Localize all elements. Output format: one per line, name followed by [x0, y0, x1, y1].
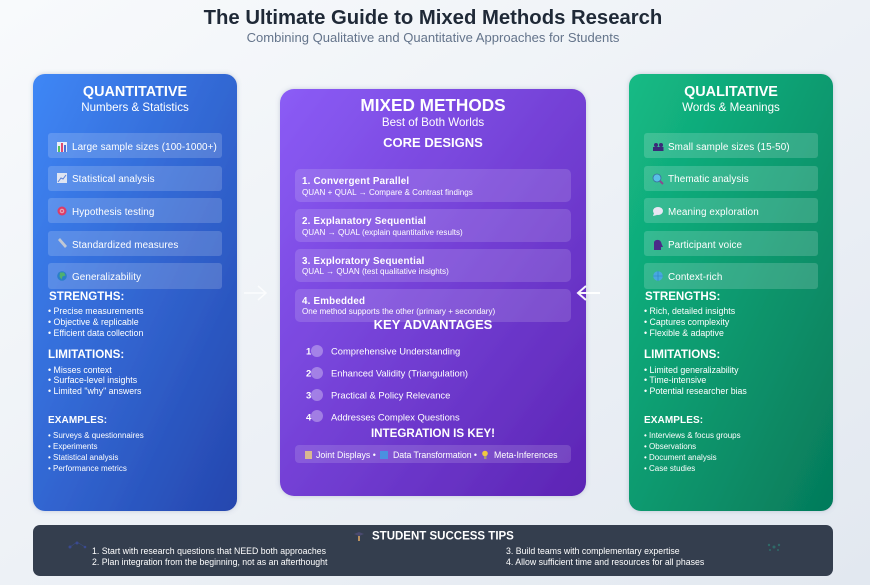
design 2: 2. Explanatory Sequential	[302, 216, 426, 227]
integration bar: Joint Displays •	[316, 450, 376, 460]
strengths: • Flexible & adaptive	[644, 328, 724, 338]
strengths: • Rich, detailed insights	[644, 306, 736, 316]
advantage 4: 4	[306, 412, 312, 424]
arrow: qualitative to mixed	[578, 286, 600, 300]
limitations: • Surface-level insights	[48, 375, 138, 385]
strengths: • Precise measurements	[48, 306, 144, 316]
advantage 1: 1	[306, 346, 312, 358]
examples: EXAMPLES:	[644, 415, 703, 426]
limitations	[644, 348, 747, 396]
integration bar	[295, 445, 571, 463]
advantage 3: Practical & Policy Relevance	[331, 390, 450, 400]
strengths: • Objective & replicable	[48, 317, 139, 327]
item: meaning exploration: Meaning exploration	[668, 207, 759, 218]
examples: • Interviews & focus groups	[644, 431, 741, 440]
tips heading: STUDENT SUCCESS TIPS	[372, 530, 514, 542]
item: statistical analysis: Statistical analysis	[72, 174, 155, 185]
examples	[644, 415, 741, 473]
panel: mixed methods	[280, 89, 586, 496]
examples	[48, 415, 144, 473]
item: generalizability: Generalizability	[72, 272, 141, 283]
design 4	[295, 289, 571, 322]
advantage 2: 2	[306, 368, 311, 380]
examples: • Surveys & questionnaires	[48, 431, 144, 440]
icon: graduation cap	[354, 532, 364, 541]
quantitative heading: QUANTITATIVE	[83, 84, 187, 100]
item: meaning exploration	[644, 198, 818, 223]
tips column 1: 2. Plan integration from the beginning, not as an afterthought	[92, 557, 328, 567]
tips column 1: 1. Start with research questions that NEED both approaches	[92, 546, 327, 556]
design 1: 1. Convergent Parallel	[302, 176, 409, 187]
strengths: STRENGTHS:	[49, 290, 124, 303]
qualitative heading: QUALITATIVE	[684, 84, 778, 100]
examples: EXAMPLES:	[48, 415, 107, 426]
panel: quantitative	[33, 74, 237, 511]
item: statistical analysis	[48, 166, 222, 191]
examples: • Observations	[644, 442, 696, 451]
item: hypothesis testing	[48, 198, 222, 223]
mixed methods subheading: Best of Both Worlds	[382, 116, 484, 129]
item: large sample sizes: Large sample sizes (100-1000+)	[72, 142, 217, 153]
tips column 2: 4. Allow sufficient time and resources for all phases	[506, 557, 705, 567]
design 4: One method supports the other (primary + secondary)	[302, 307, 496, 316]
limitations: • Misses context	[48, 365, 112, 375]
icon: network right	[768, 544, 780, 551]
arrow: quantitative to mixed	[244, 286, 266, 300]
design 3: 3. Exploratory Sequential	[302, 256, 425, 267]
tips column 1	[92, 546, 328, 567]
item: generalizability	[48, 263, 222, 289]
item: standardized measures	[48, 231, 222, 256]
item: large sample sizes	[48, 133, 222, 158]
strengths: STRENGTHS:	[645, 290, 720, 303]
advantage 4	[306, 410, 460, 424]
advantage 2: Enhanced Validity (Triangulation)	[331, 368, 468, 378]
qualitative subheading: Words & Meanings	[682, 101, 780, 114]
design 3	[295, 249, 571, 282]
examples: • Case studies	[644, 464, 695, 473]
examples: • Document analysis	[644, 453, 717, 462]
examples: • Performance metrics	[48, 464, 127, 473]
panel: student success tips	[33, 525, 833, 576]
subtitle: Combining Qualitative and Quantitative Approaches for Students	[247, 30, 620, 45]
limitations: LIMITATIONS:	[644, 348, 720, 361]
key advantages heading: KEY ADVANTAGES	[374, 317, 493, 332]
design 3: QUAL → QUAN (test qualitative insights)	[302, 267, 449, 276]
panel: qualitative	[629, 74, 833, 511]
tips column 2: 3. Build teams with complementary expertise	[506, 546, 680, 556]
examples: • Experiments	[48, 442, 97, 451]
advantage 3: 3	[306, 390, 311, 402]
design 1: QUAN + QUAL → Compare & Contrast findings	[302, 188, 473, 197]
limitations: • Potential researcher bias	[644, 386, 747, 396]
limitations: • Limited generalizability	[644, 365, 739, 375]
advantage 1: Comprehensive Understanding	[331, 346, 460, 356]
examples: • Statistical analysis	[48, 453, 118, 462]
strengths: • Captures complexity	[644, 317, 730, 327]
design 2	[295, 209, 571, 242]
core designs heading: CORE DESIGNS	[383, 135, 483, 150]
design 4: 4. Embedded	[302, 296, 365, 307]
item: small sample sizes	[644, 133, 818, 158]
tips column 2	[506, 546, 705, 567]
strengths	[644, 290, 736, 338]
integration bar: Meta-Inferences	[494, 450, 558, 460]
mixed methods heading: MIXED METHODS	[360, 95, 506, 115]
strengths	[48, 290, 144, 338]
item: context-rich	[644, 263, 818, 289]
limitations: LIMITATIONS:	[48, 348, 124, 361]
item: hypothesis testing: Hypothesis testing	[72, 207, 154, 218]
integration heading: INTEGRATION IS KEY!	[371, 427, 495, 440]
strengths: • Efficient data collection	[48, 328, 143, 338]
item: thematic analysis: Thematic analysis	[668, 174, 749, 185]
item: thematic analysis	[644, 166, 818, 191]
item: participant voice: Participant voice	[668, 240, 743, 251]
item: small sample sizes: Small sample sizes (15-50)	[668, 142, 790, 153]
icon: network left	[68, 542, 86, 548]
design 2: QUAN → QUAL (explain quantitative results)	[302, 228, 463, 237]
advantage 4: Addresses Complex Questions	[331, 412, 460, 422]
quantitative subheading: Numbers & Statistics	[81, 101, 189, 114]
item: standardized measures: Standardized measures	[72, 240, 178, 251]
limitations: • Time-intensive	[644, 375, 706, 385]
design 1	[295, 169, 571, 202]
integration bar: Data Transformation •	[393, 450, 477, 460]
item: context-rich: Context-rich	[668, 272, 722, 283]
item: participant voice	[644, 231, 818, 256]
limitations	[48, 348, 142, 396]
limitations: • Limited "why" answers	[48, 386, 142, 396]
title: The Ultimate Guide to Mixed Methods Research	[204, 7, 662, 29]
